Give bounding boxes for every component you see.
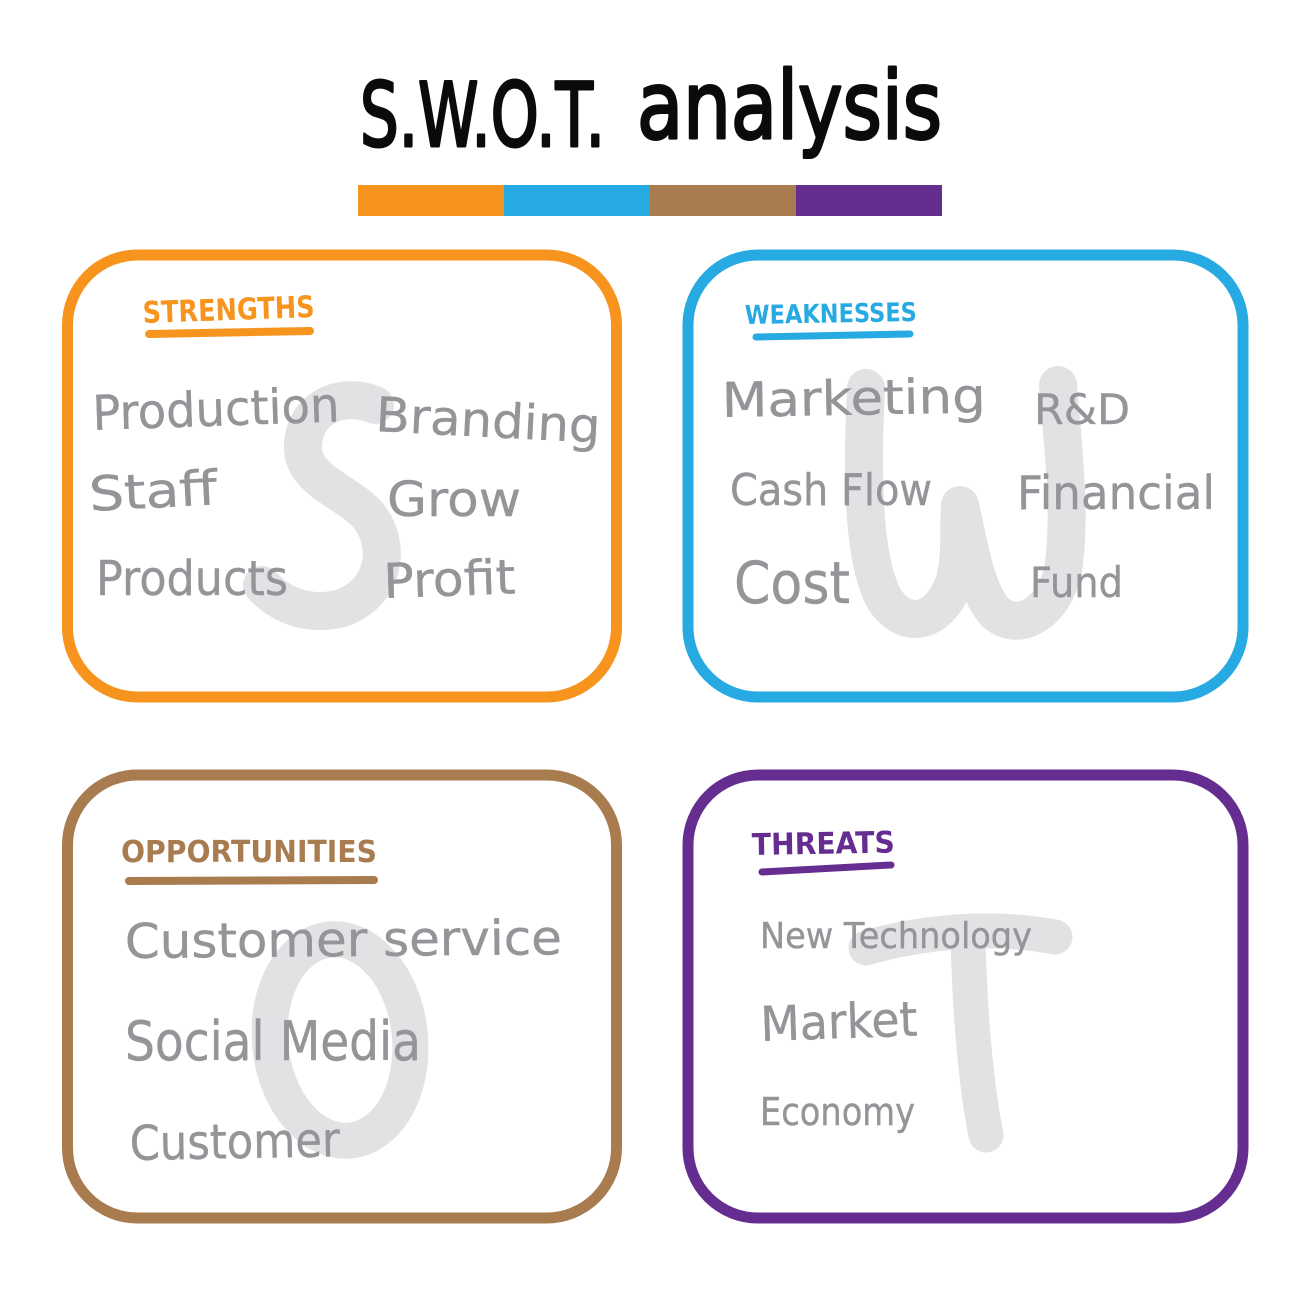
item: Market: Market xyxy=(759,992,918,1053)
colour bar xyxy=(358,185,942,216)
heading underline xyxy=(762,865,891,872)
title: S.W.O.T. xyxy=(360,64,605,167)
heading: weaknesses: WEAKNESSES xyxy=(745,298,917,331)
heading: strengths: STRENGTHS xyxy=(142,290,315,331)
big letter S xyxy=(262,400,382,611)
item: Production: Production xyxy=(91,377,340,442)
item: Grow: Grow xyxy=(387,472,521,528)
panel border: weaknesses xyxy=(688,255,1243,697)
item: Products: Products xyxy=(96,551,288,607)
big letter O xyxy=(260,932,420,1148)
item: Customer service: Customer service xyxy=(125,910,562,970)
big letter T xyxy=(866,931,1055,1135)
item: Cost: Cost xyxy=(734,549,850,617)
heading underline xyxy=(129,880,374,881)
panel: weaknesses xyxy=(688,255,1243,697)
item: Branding: Branding xyxy=(374,387,602,455)
item: Profit: Profit xyxy=(382,549,516,610)
item: Customer: Customer xyxy=(129,1112,340,1172)
heading: threats: THREATS xyxy=(752,826,895,863)
panel: opportunities xyxy=(68,775,616,1218)
heading underline xyxy=(149,331,310,334)
panel border: strengths xyxy=(68,255,616,697)
item: Social Media: Social Media xyxy=(125,1010,421,1073)
panel: strengths xyxy=(68,255,616,697)
item: Staff: Staff xyxy=(88,460,220,523)
panel border: opportunities xyxy=(68,775,616,1218)
panel: threats xyxy=(688,775,1243,1218)
item: Financial: Financial xyxy=(1017,466,1215,520)
heading: opportunities: OPPORTUNITIES xyxy=(121,835,377,870)
item: Cash Flow: Cash Flow xyxy=(730,465,932,516)
heading underline xyxy=(756,334,910,337)
item: Fund: Fund xyxy=(1030,558,1123,607)
item: Economy: Economy xyxy=(760,1090,915,1134)
panel border: threats xyxy=(688,775,1243,1218)
title: analysis xyxy=(637,52,942,161)
item: New Technology: New Technology xyxy=(760,916,1032,957)
item: R&D: R&D xyxy=(1034,385,1130,434)
item: Marketing: Marketing xyxy=(721,368,986,429)
big letter W xyxy=(864,385,1067,621)
title xyxy=(360,52,942,167)
